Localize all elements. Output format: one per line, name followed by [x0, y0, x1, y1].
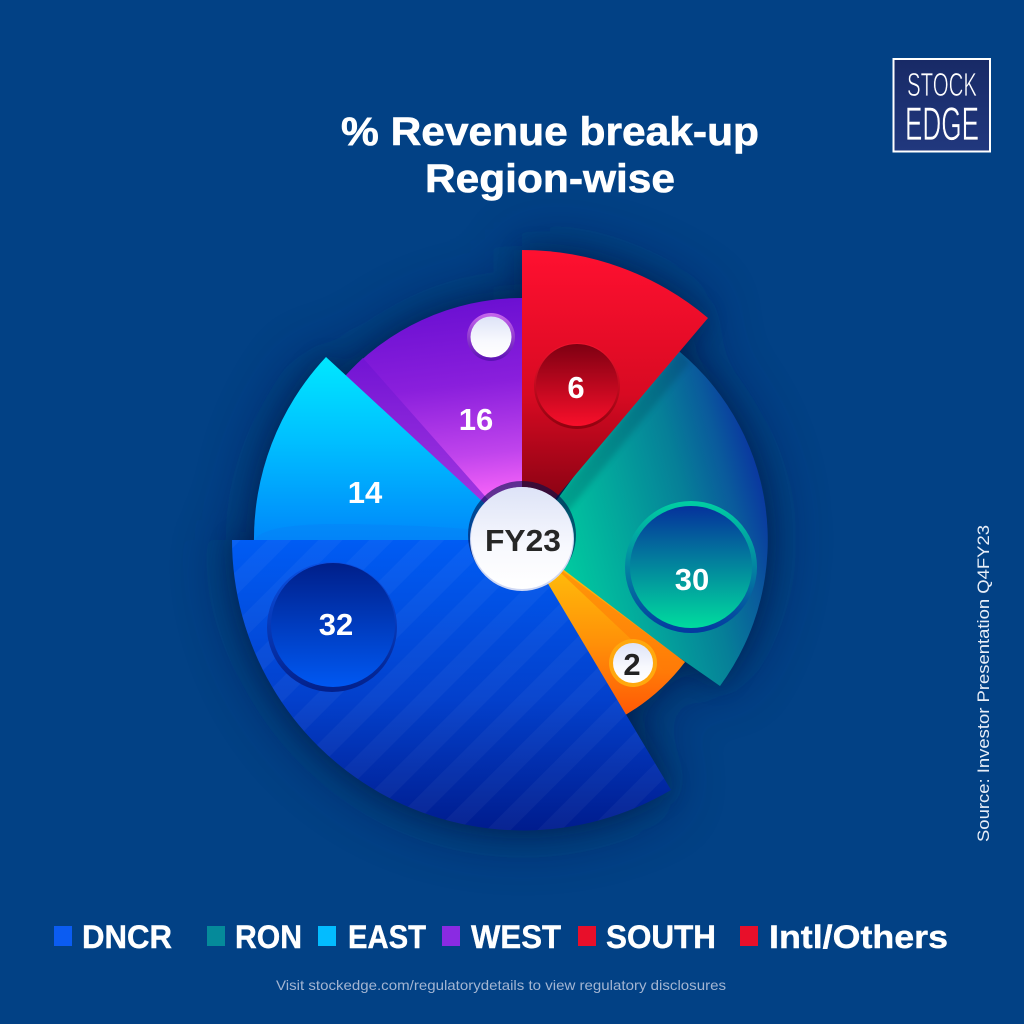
pie chart: revenue by region	[232, 250, 768, 830]
legend item: SOUTH: SOUTH	[606, 919, 716, 955]
legend item: RON: RON	[235, 919, 302, 955]
logo: StockEdge	[894, 59, 990, 152]
badge: SOUTH 6: 6	[567, 370, 585, 405]
slice: EAST cyan	[254, 357, 522, 545]
slice: WEST purple	[340, 298, 522, 538]
badge: DNCR 32	[267, 562, 397, 692]
slice: Intl/Others orange	[522, 538, 685, 718]
badge: WEST white dot	[467, 313, 515, 361]
badge: Intl/Others 2	[609, 639, 657, 687]
label: WEST 16: 16	[459, 402, 493, 437]
legend item: RON	[207, 919, 302, 955]
title	[341, 110, 759, 201]
badge: RON 30	[625, 501, 757, 633]
title: % Revenue break-up	[341, 110, 759, 154]
slice: DNCR blue	[232, 540, 671, 830]
badge: SOUTH 6	[534, 343, 620, 429]
legend item: EAST: EAST	[348, 919, 426, 955]
center badge: FY23: FY23	[485, 523, 561, 558]
center badge: FY23	[468, 481, 576, 591]
title: Region-wise	[425, 157, 675, 201]
footer disclosure: Visit stockedge.com/regulatorydetails to view regulatory disclosures	[276, 977, 726, 993]
legend item: EAST	[318, 919, 426, 955]
legend item: WEST: WEST	[471, 919, 561, 955]
legend item: DNCR: DNCR	[82, 919, 172, 955]
legend	[54, 919, 948, 955]
slice: SOUTH red	[522, 250, 708, 538]
slice: RON teal	[522, 344, 768, 686]
badge: Intl/Others 2: 2	[623, 647, 641, 682]
badge: RON 30: 30	[675, 562, 709, 597]
logo: StockEdge: STOCK	[907, 66, 977, 103]
legend item: Intl/Others: Intl/Others	[769, 919, 948, 955]
badge: DNCR 32: 32	[319, 607, 353, 642]
source note: Source: Investor Presentation Q4FY23	[974, 525, 993, 842]
label: EAST 14: 14	[348, 475, 383, 510]
